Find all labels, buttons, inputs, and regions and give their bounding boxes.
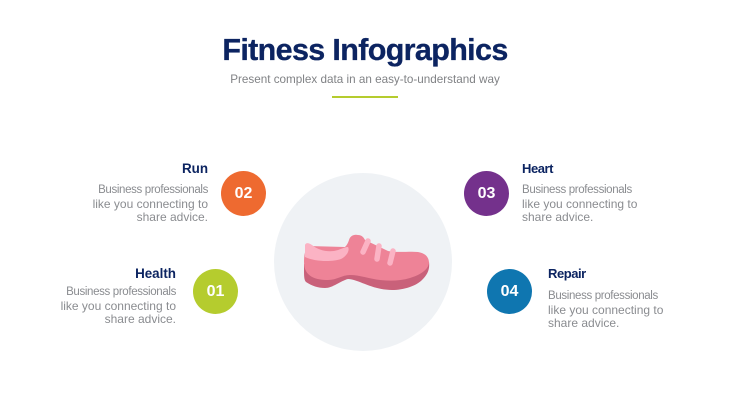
badge 01: 01 <box>207 283 224 300</box>
badge 04 <box>487 269 532 314</box>
text: Repair <box>548 290 663 330</box>
central circle <box>274 173 452 351</box>
badge 01 <box>193 269 238 314</box>
text: Health: Business professionals <box>66 286 176 298</box>
badge 02 <box>221 171 266 216</box>
text: Run: share advice. <box>137 210 208 224</box>
text: Health: share advice. <box>105 312 176 326</box>
item: Repair <box>487 266 663 330</box>
heading: Repair: Repair <box>548 266 586 281</box>
text: Repair: like you connecting to <box>548 303 663 317</box>
text: Heart <box>522 184 637 224</box>
text: Run <box>93 184 208 224</box>
item: Heart <box>464 161 637 224</box>
icon: running shoe <box>304 234 430 290</box>
heading: Health: Health <box>135 266 176 281</box>
text: Run: like you connecting to <box>93 197 208 211</box>
badge 03: 03 <box>478 185 495 202</box>
text: Run: Business professionals <box>98 184 208 196</box>
heading: Heart: Heart <box>522 161 553 176</box>
text: Repair: Business professionals <box>548 290 658 302</box>
item: Run <box>93 161 266 224</box>
text: Health: like you connecting to <box>61 299 176 313</box>
badge 03 <box>464 171 509 216</box>
text: Heart: Business professionals <box>522 184 632 196</box>
item: Health <box>61 266 238 326</box>
title underline <box>332 96 398 98</box>
subtitle: Present complex data in an easy-to-understand way <box>230 73 500 86</box>
text: Heart: like you connecting to <box>522 197 637 211</box>
text: Heart: share advice. <box>522 210 593 224</box>
title: Fitness Infographics <box>222 33 508 67</box>
heading: Run: Run <box>182 161 208 176</box>
text: Health <box>61 286 176 326</box>
badge 04: 04 <box>501 283 518 300</box>
badge 02: 02 <box>235 185 252 202</box>
text: Repair: share advice. <box>548 316 619 330</box>
